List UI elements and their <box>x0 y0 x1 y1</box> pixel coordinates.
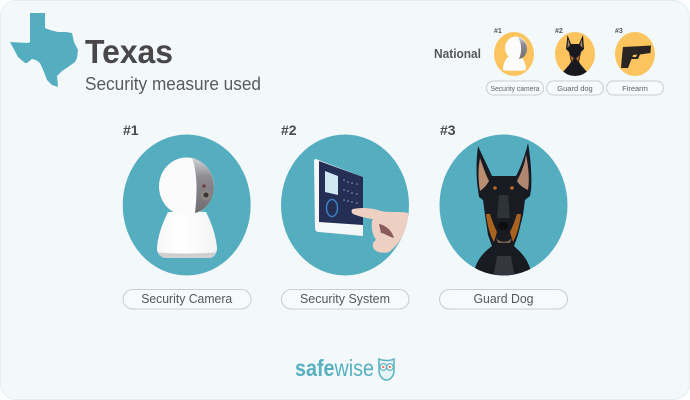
label text: Security System <box>300 292 390 306</box>
title: Texas <box>85 33 173 70</box>
safewise logo <box>295 355 394 381</box>
icon: owl <box>379 359 394 380</box>
panel: rank 3 guard dog <box>440 122 568 309</box>
label text: Security camera <box>490 84 540 93</box>
rank label: #2 <box>281 122 297 138</box>
label pill <box>123 290 251 309</box>
rank label: #3 <box>615 28 623 35</box>
subtitle: Security measure used <box>85 74 261 94</box>
label text: Guard Dog <box>474 292 534 306</box>
icon: dog on yellow circle <box>555 32 595 77</box>
icon: camera on yellow circle <box>494 32 534 76</box>
label pill <box>282 290 409 309</box>
icon: Texas map <box>10 13 78 87</box>
label pill <box>440 290 568 309</box>
icon: security camera <box>157 158 217 258</box>
label pill <box>606 81 664 95</box>
wordmark: safewise <box>295 355 374 381</box>
label pill <box>546 81 604 95</box>
icon: handgun on yellow circle <box>615 32 655 76</box>
teal circle <box>440 134 568 276</box>
label text: Guard dog <box>557 84 593 93</box>
label text: Security Camera <box>141 292 232 306</box>
national item 2: guard dog <box>546 28 604 95</box>
panel: rank 2 security system <box>281 122 409 309</box>
national item 1: security camera <box>486 28 544 95</box>
label pill <box>486 81 544 95</box>
teal circle <box>123 134 251 276</box>
rank label: #2 <box>555 28 563 35</box>
teal circle <box>281 134 409 276</box>
rank label: #3 <box>440 122 456 138</box>
national item 3: firearm <box>606 28 664 95</box>
national heading: National <box>434 46 481 61</box>
panel: rank 1 security camera <box>123 122 251 309</box>
icon: alarm keypad and hand <box>314 159 408 253</box>
label text: Firearm <box>622 84 648 93</box>
rank label: #1 <box>123 122 139 138</box>
icon: doberman <box>473 143 533 278</box>
rank label: #1 <box>494 28 502 35</box>
